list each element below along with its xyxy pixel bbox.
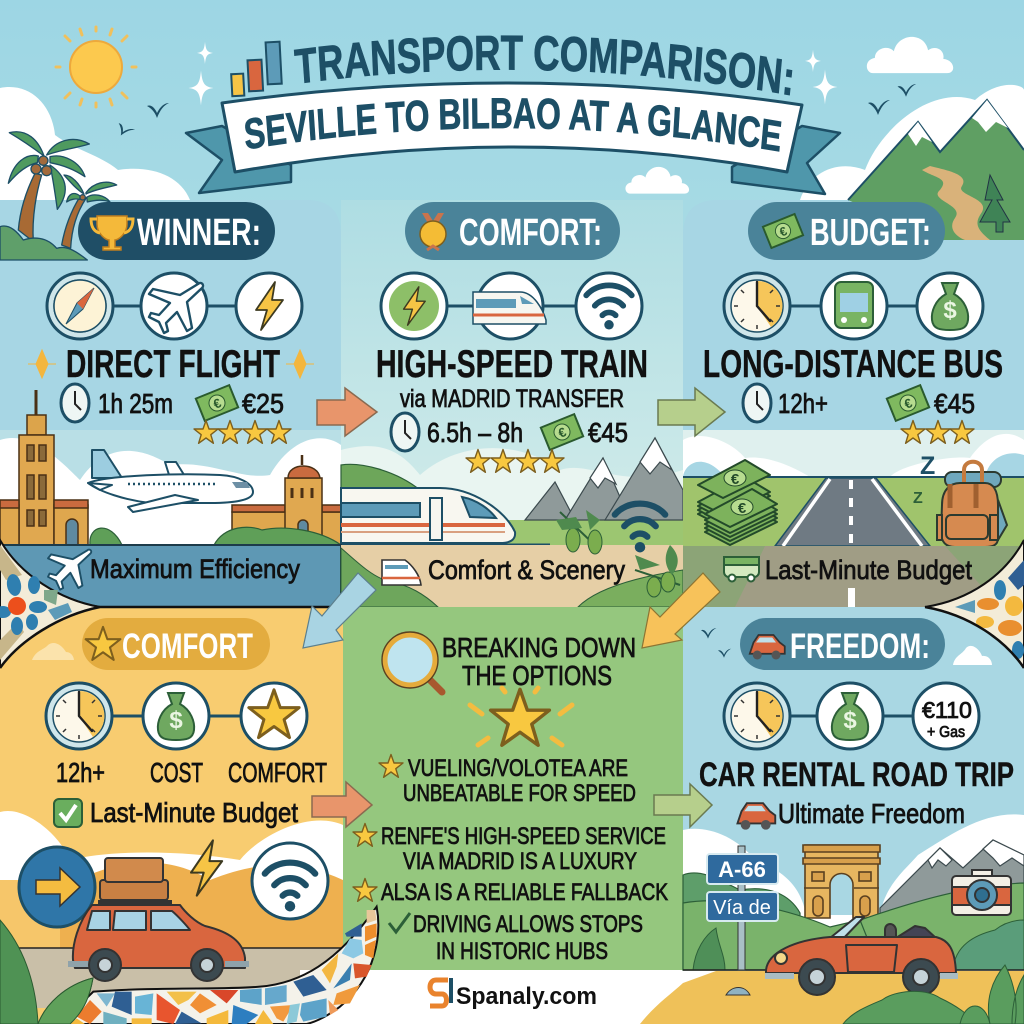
mountains with trail [848,100,1024,240]
mosaic: bottom ribbon [60,907,378,1024]
icon: logo [430,978,451,1006]
sparkles and birds [114,42,916,140]
triumphal arch [803,845,880,918]
panel: comfort header pill: COMFORT: [459,212,602,254]
icon row: comfort [381,273,642,339]
icon row: freedom: + Gas [927,724,965,741]
band: comfort and scenery [341,545,683,607]
scene: train [341,438,683,546]
clouds: upper right [625,37,1024,240]
sleep marks [913,452,935,507]
icon row: freedom [724,683,979,749]
background sky [0,0,1024,545]
arrow: orange top [317,388,377,436]
mountains [525,438,683,520]
panel: freedom [640,607,1024,1024]
pill: freedom: FREEDOM: [790,627,930,666]
icon: small bus [724,557,759,582]
band: last-minute budget [683,546,1024,607]
item: driving: IN HISTORIC HUBS [436,938,608,965]
item: renfe [353,823,666,875]
pill: comfort: COMFORT [122,627,253,666]
arrow: green lower [654,784,712,827]
road signs: Vía de [713,897,771,919]
labels [56,757,327,788]
panel: winner header pill [78,202,275,260]
labels: 12h+ [56,757,105,788]
icon: banknote [763,214,803,248]
pill: freedom [740,618,945,670]
arrow: blue diagonal [303,573,376,648]
icon: wifi circle [252,843,328,919]
panel: footer [300,970,720,1024]
pill: comfort [82,618,270,670]
foreground bushes and stone [726,965,1024,1024]
cloud decal [32,643,74,660]
mosaic: right wedge [925,540,1024,668]
icon: eco bolt [381,273,447,339]
panel: footer: Spanaly.com [456,983,597,1010]
sleep marks: Z [913,490,923,507]
title: direct flight: DIRECT FLIGHT [66,343,280,386]
labels: COST [150,757,203,788]
money stacks: € [731,471,740,488]
icon: lightning [191,840,222,896]
title line 1: TRANSPORT COMPARISON: [294,35,792,96]
stats: train: €45 [588,417,628,448]
item: vueling: UNBEATABLE FOR SPEED [403,780,636,807]
icon row: freedom: €110 [922,697,972,723]
stats: train: 6.5h – 8h [427,417,523,448]
item: driving: DRIVING ALLOWS STOPS [413,911,643,938]
item: renfe: RENFE'S HIGH-SPEED SERVICE [381,823,666,850]
clouds [683,814,1024,970]
olive sprig [635,545,680,597]
icon: plane circle [141,273,207,339]
item: renfe: VIA MADRID IS A LUXURY [403,848,637,875]
panel: winner header pill: WINNER: [137,212,261,254]
band: maximum efficiency: Maximum Efficiency [90,554,300,584]
high-speed train [341,488,550,545]
heading: BREAKING DOWN [442,632,636,663]
icon: clock [724,273,790,339]
icon: bolt circle [236,273,302,339]
check and label: Last-Minute Budget [90,797,298,828]
lower yellow scene [0,811,343,948]
icon: bus circle [821,273,887,339]
sand road [640,971,1024,1024]
panel: green options [343,607,683,970]
band: last-minute budget: Last-Minute Budget [765,555,972,585]
icon: bar chart [230,42,282,96]
icon: wifi circle [576,273,642,339]
stats: train [391,385,628,472]
panel: center top background [341,200,683,545]
scene: seville [0,390,341,545]
subtitle: ultimate freedom [737,798,965,830]
right building [232,455,341,545]
arrow: orange lower [312,782,372,827]
stats: bus: 12h+ [778,388,828,419]
birds and cloud decal [701,628,992,665]
icon: magnifier [382,632,442,692]
icon: medal [420,213,446,250]
icon: wifi [615,504,665,552]
panel: budget header pill [748,202,945,260]
olive branch [556,510,602,554]
leaf over mosaic [38,978,93,1024]
banner ribbon: SEVILLE TO BILBAO AT A GLANCE [245,98,782,152]
tower [0,390,88,545]
icon: big star [470,688,572,745]
panel: comfort header pill [405,202,620,260]
leaves [0,920,93,1024]
icon: train circle [473,273,546,339]
bushes [693,928,725,970]
icon: small plane [48,550,91,590]
panel: yellow comfort [0,607,343,1024]
item: vueling: VUELING/VOLOTEA ARE [408,755,628,782]
icon: arrow sign [19,847,95,927]
sleep marks: Z [920,452,935,480]
stats: train: via MADRID TRANSFER [400,385,624,413]
backpack [937,462,1007,547]
icon: sun [56,27,136,107]
mosaic: left wedge [0,540,100,668]
heading: THE OPTIONS [462,660,612,691]
arrow: yellow diagonal [642,573,720,648]
stats: direct flight: 1h 25m [98,388,173,419]
hills [683,873,1024,970]
arrow: green top [658,388,725,436]
panel: budget background [683,200,1024,430]
labels: COMFORT [228,757,327,788]
stats: direct flight [61,384,291,443]
money stacks: € [738,500,747,517]
icon: money bag [917,273,983,339]
icon: compass [47,273,113,339]
panel: budget header pill: BUDGET: [810,212,931,254]
road signs [707,846,778,970]
palm trees and bush [0,132,117,260]
stats: bus [743,384,975,443]
icon: camera [952,870,1011,915]
icon row: budget [724,273,983,339]
road signs: A-66 [718,857,766,882]
car with luggage [68,858,249,981]
subtitle: ultimate freedom: Ultimate Freedom [778,798,965,829]
money stacks [698,460,777,545]
item: vueling [379,754,636,807]
item: driving [389,911,643,965]
mountains [880,840,1024,930]
icon: small train [382,560,421,585]
heading [442,632,636,691]
stats: bus: €45 [934,388,975,419]
icon row: yellow panel [46,683,307,749]
stats: direct flight: €25 [242,388,284,419]
convertible car [765,917,958,995]
airliner [88,450,253,512]
banner ribbon [184,82,842,196]
clouds: upper left [0,87,250,260]
band: maximum efficiency [0,545,341,607]
icon row: winner [47,273,302,339]
band: comfort and scenery: Comfort & Scenery [428,555,625,585]
item: alsa: ALSA IS A RELIABLE FALLBACK [381,879,668,906]
panel: winner background [0,200,341,430]
scene: road [683,430,1024,547]
title: high-speed train: HIGH-SPEED TRAIN [376,343,648,386]
icon: trophy [91,216,133,250]
